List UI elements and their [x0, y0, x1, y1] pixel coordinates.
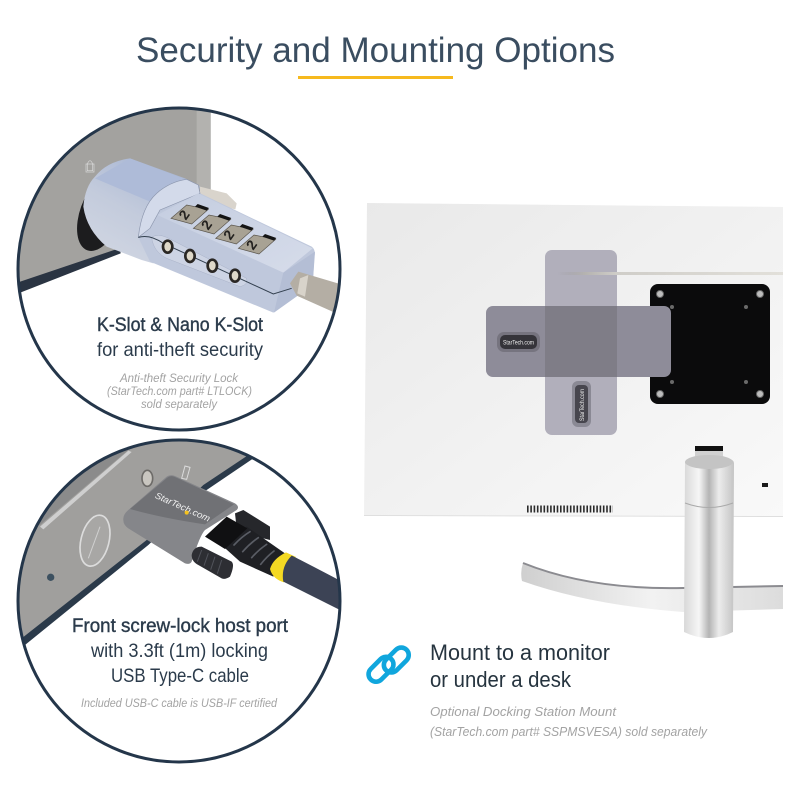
mount heading: or under a desk: [430, 667, 572, 692]
circle outline: [18, 108, 340, 430]
note: sold separately: (StarTech.com part# LTLOCK): [107, 384, 252, 398]
photo: locking USB-C connector: StarTech.com: [154, 490, 212, 524]
note: USB-IF certified: Included USB-C cable is USB-IF certified: [81, 696, 277, 710]
monitor seam: [558, 272, 783, 275]
note: sold separately: Anti-theft Security Lock: [119, 371, 239, 385]
heading: K-Slot: K-Slot & Nano K-Slot: [97, 314, 264, 336]
title underline: [298, 76, 453, 79]
mount note: [430, 704, 708, 739]
photo: combination lock in K-Slot: [13, 100, 343, 315]
photo: combination lock in K-Slot: 2: [243, 237, 260, 252]
photo: locking USB-C connector: [13, 440, 343, 645]
photo: combination lock in K-Slot: 2: [198, 217, 215, 232]
icon: chain link: [365, 644, 412, 685]
mount heading: Mount to a monitor: [430, 640, 610, 665]
dock: vertical position: [545, 250, 617, 435]
note: sold separately: [107, 371, 252, 411]
stand hinge: [695, 446, 723, 459]
photo: combination lock in K-Slot: 2: [220, 227, 238, 242]
mount note: Optional Docking Station Mount: [430, 704, 617, 719]
subheading: locking cable: [90, 640, 268, 687]
circle outline: [18, 440, 340, 762]
dock: vertical position: StarTech.com: [579, 389, 586, 421]
subheading: locking cable: USB Type-C cable: [111, 665, 249, 687]
panel: K-Slot security circle: [13, 100, 343, 430]
photo: combination lock in K-Slot: 2: [175, 207, 193, 222]
heading: screw-lock port: Front screw-lock host port: [72, 615, 289, 637]
panel: monitor mount photo: [364, 203, 783, 638]
monitor back: [364, 203, 783, 516]
panel: screw-lock host port circle: [13, 440, 343, 762]
stand base: [521, 563, 783, 612]
VESA plate: [650, 284, 770, 404]
dock: horizontal position: StarTech.com: [503, 340, 534, 346]
title: Security and Mounting Options: [136, 31, 615, 70]
subheading: locking cable: with 3.3ft (1m) locking: [90, 640, 268, 662]
stand pole: [684, 455, 734, 638]
note: sold separately: sold separately: [141, 397, 218, 411]
dock: horizontal position: [486, 306, 671, 377]
mount note: (StarTech.com part# SSPMSVESA) sold separately: [430, 724, 708, 739]
subheading: anti-theft: for anti-theft security: [97, 339, 263, 361]
vent: [527, 506, 613, 512]
K-slot on monitor: [762, 483, 768, 487]
mount heading: [430, 640, 610, 692]
